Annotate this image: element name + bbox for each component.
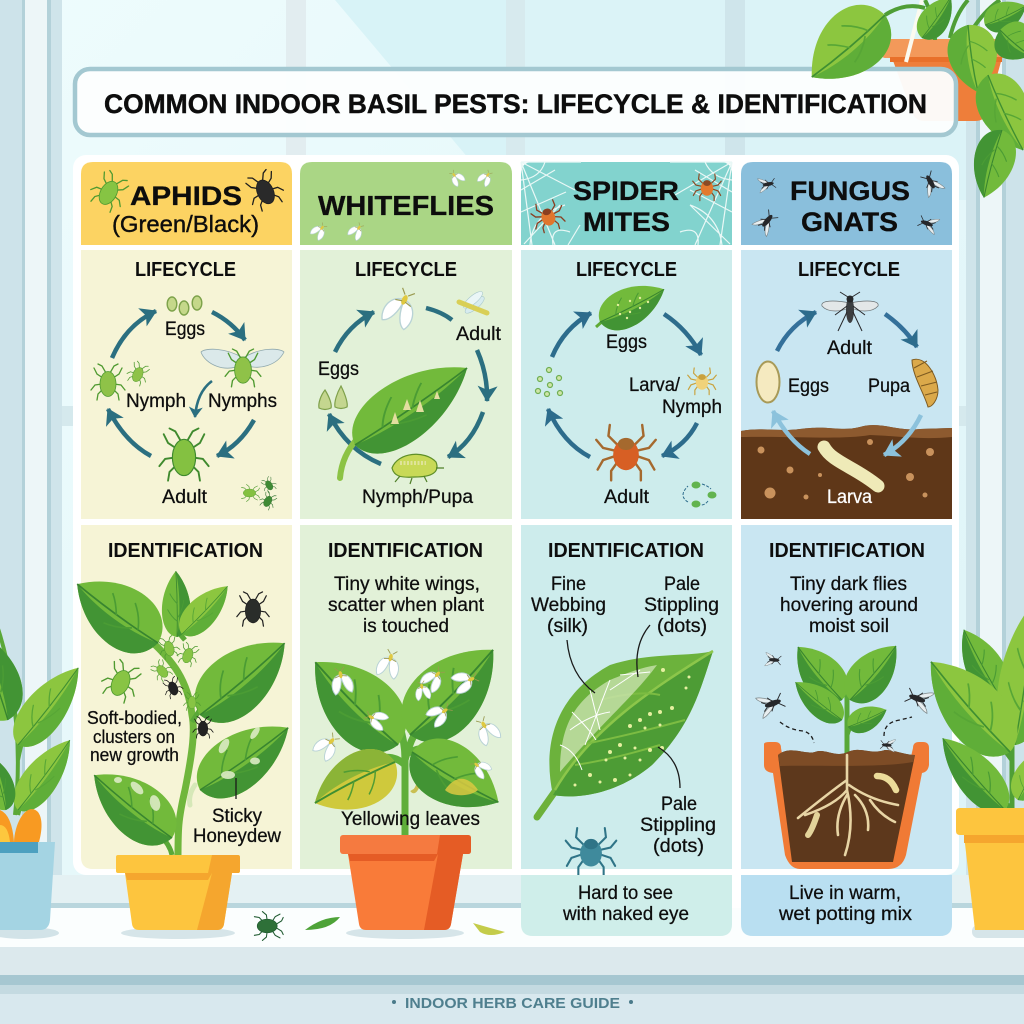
spider mites identification panel (521, 525, 732, 875)
spider mites identification panel: Fine (551, 574, 586, 595)
footer: INDOOR HERB CARE GUIDE (405, 996, 620, 1012)
seedling (783, 633, 911, 760)
soil (741, 425, 952, 519)
honeydew spots (114, 726, 261, 812)
right window plant (908, 597, 1024, 938)
whiteflies lifecycle panel: Adult (456, 324, 502, 345)
fungus gnats identification panel: IDENTIFICATION (769, 540, 925, 562)
aphid plant: Honeydew (193, 826, 281, 847)
fungus gnats identification panel (741, 525, 952, 869)
pupa (912, 359, 938, 407)
orange flower bud (0, 809, 42, 842)
fungus gnats identification panel: Tiny dark flies (790, 574, 907, 595)
spider mites lifecycle panel: Nymph (662, 397, 722, 418)
whiteflies identification panel: Tiny white wings, (334, 574, 480, 595)
spider mites lifecycle panel: LIFECYCLE (576, 259, 677, 281)
spider mites header (521, 162, 732, 245)
small aphid cluster (242, 475, 279, 511)
spider mites header: MITES (583, 207, 670, 237)
spider mites identification panel: Pale (661, 794, 697, 815)
spider mites lifecycle panel: Eggs (606, 332, 647, 353)
fungus gnats note (741, 875, 952, 936)
spider mites identification panel: Pale (664, 574, 700, 595)
yellow pot (116, 855, 240, 939)
aphids lifecycle panel: Nymph (126, 391, 186, 412)
eggs (319, 386, 347, 410)
spider mites identification panel: Stippling (640, 815, 716, 836)
whiteflies on leaves (311, 648, 503, 780)
spider mites header: SPIDER (573, 176, 679, 206)
whiteflies header: WHITEFLIES (318, 190, 494, 221)
aphids header: (Green/Black) (112, 211, 259, 237)
fungus gnats lifecycle panel: Adult (827, 338, 873, 359)
potted soil and roots (764, 742, 929, 869)
egg dots (536, 368, 562, 396)
fungus gnats note: Live in warm, (789, 883, 901, 904)
spider mites note (521, 875, 732, 936)
white board (73, 155, 959, 908)
aphids lifecycle panel: Nymphs (208, 391, 277, 412)
blue pot (0, 842, 59, 939)
spider mites lifecycle panel (521, 250, 732, 519)
fungus gnats note: wet potting mix (778, 904, 913, 925)
lifecycle arrows (777, 312, 917, 351)
column 1: aphids (81, 162, 292, 869)
spider mites identification panel: (silk) (547, 616, 588, 637)
aphid plant: Sticky (212, 806, 262, 827)
title banner (75, 69, 956, 135)
fungus gnats header: FUNGUS (790, 176, 910, 206)
small cycle icon (683, 482, 716, 508)
whiteflies identification panel: IDENTIFICATION (328, 540, 483, 562)
whiteflies lifecycle panel: Eggs (318, 359, 359, 380)
gnats around pot (756, 652, 934, 752)
leaf with eggs (338, 343, 484, 478)
whitefly plant: Yellowing leaves (341, 809, 480, 830)
aphids lifecycle panel (81, 250, 292, 519)
aphid plant (60, 559, 304, 859)
aphids lifecycle panel: LIFECYCLE (135, 259, 236, 281)
larva (824, 447, 878, 486)
whiteflies header (300, 162, 512, 245)
fungus gnats identification panel: moist soil (809, 616, 889, 637)
whiteflies identification panel: is touched (363, 616, 449, 637)
fungus gnats header (741, 162, 952, 245)
fungus gnats lifecycle panel: Larva (827, 487, 872, 508)
top right foliage (791, 0, 1024, 203)
blue mite (566, 828, 616, 875)
lifecycle arrows (548, 313, 701, 457)
whiteflies lifecycle panel (300, 250, 512, 519)
aphids header: APHIDS (130, 181, 242, 211)
spider mites lifecycle panel: Adult (604, 487, 650, 508)
spider mites identification panel: (dots) (657, 616, 707, 637)
fungus gnats lifecycle panel: Eggs (788, 376, 829, 397)
fungus gnats identification panel: hovering around (780, 595, 918, 616)
spider mites lifecycle panel: Larva/ (629, 375, 681, 396)
callout lines (567, 625, 680, 788)
winged aphid (201, 349, 284, 387)
aphids identification panel (81, 525, 292, 869)
callout text: Soft-bodied, (87, 708, 182, 728)
fungus gnats lifecycle panel: Pupa (868, 376, 910, 397)
stippling dots (574, 668, 690, 786)
whiteflies lifecycle panel: Nymph/Pupa (362, 487, 473, 508)
aphid plant: new growth (90, 745, 179, 765)
spider mites identification panel: Webbing (531, 595, 606, 616)
spider web (521, 162, 732, 245)
left window plant (0, 620, 94, 939)
spider mites identification panel: Stippling (644, 595, 719, 616)
fungus gnats lifecycle panel: LIFECYCLE (798, 259, 900, 281)
fungus gnats lifecycle panel (741, 250, 952, 519)
aphid plant: clusters on (93, 727, 175, 747)
fungus gnats header: GNATS (801, 207, 898, 237)
leaf icon (591, 272, 673, 339)
column 2: whiteflies (300, 162, 512, 869)
fallen bits on sill (254, 912, 505, 940)
aphids on stem (237, 592, 269, 626)
webbed leaf (537, 651, 713, 817)
spider mites identification panel: IDENTIFICATION (548, 540, 704, 562)
aphids identification panel: IDENTIFICATION (108, 540, 263, 562)
column 4: fungus gnats (741, 162, 952, 936)
window sill (0, 875, 1024, 1024)
whiteflies lifecycle panel: LIFECYCLE (355, 259, 457, 281)
aphids header (81, 162, 292, 245)
whiteflies identification panel (300, 525, 512, 869)
eggs (167, 296, 202, 315)
nymph / pupa (392, 454, 444, 484)
hanging pot, top right (882, 0, 1010, 121)
whiteflies identification panel: scatter when plant (328, 595, 485, 616)
spider mites note: Hard to see (578, 883, 673, 904)
yellow pot right (956, 808, 1024, 938)
spider mites note: with naked eye (562, 904, 689, 925)
aphids lifecycle panel: Eggs (165, 319, 205, 340)
adult gnat (822, 292, 878, 331)
title banner: COMMON INDOOR BASIL PESTS: LIFECYCLE & IDENTIFICATION (104, 89, 927, 119)
egg (756, 362, 780, 402)
webbing (560, 665, 657, 772)
lifecycle arrows (329, 308, 487, 464)
lifecycle arrows (108, 311, 254, 456)
aphids lifecycle panel: Adult (162, 487, 208, 508)
orange pot (340, 835, 471, 939)
column 3: spider mites (521, 162, 732, 936)
spider mites identification panel: (dots) (653, 836, 704, 857)
whitefly plant (291, 625, 518, 835)
